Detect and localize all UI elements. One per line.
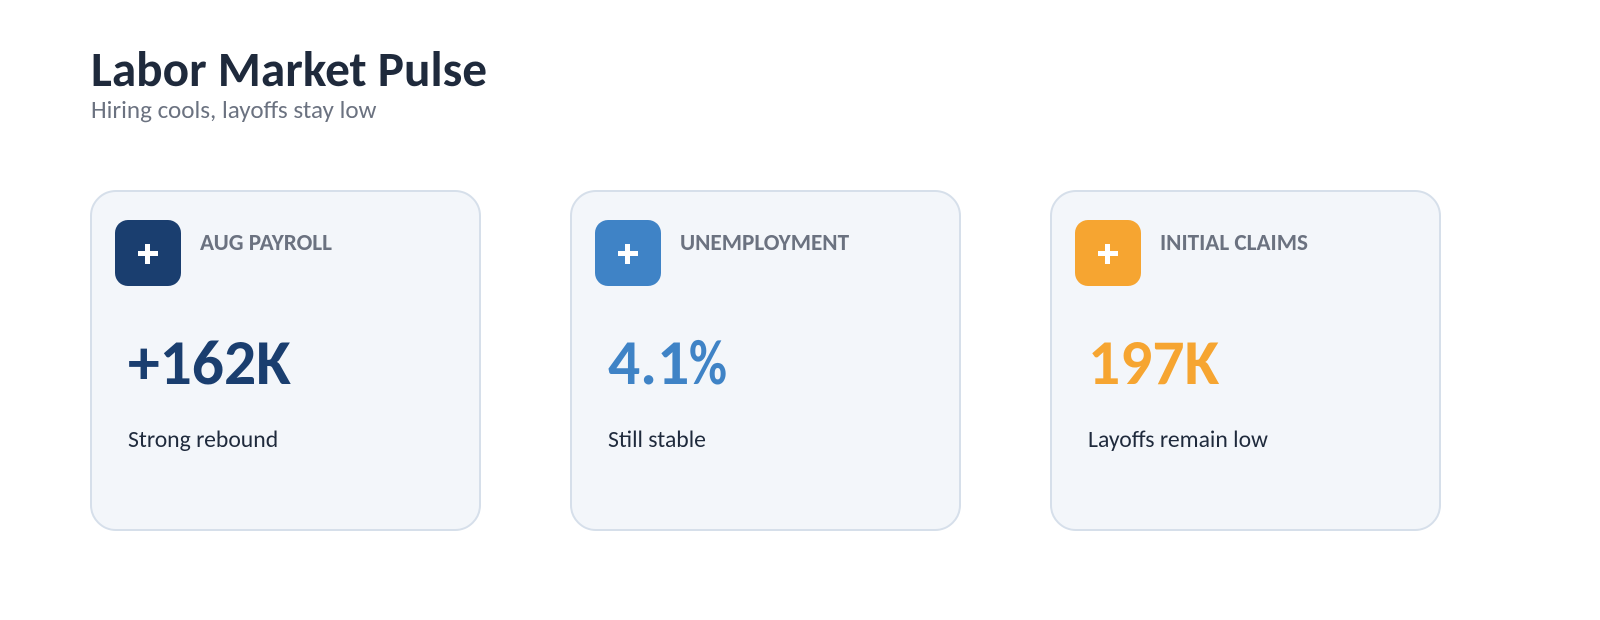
title: Labor Market Pulse — [91, 40, 487, 100]
value: 4.1%: % — [689, 325, 727, 402]
value: 4.1% — [608, 325, 727, 402]
panel: unemployment — [570, 190, 961, 531]
panel: aug payroll — [90, 190, 481, 531]
note: layoffs remain low: Layoffs remain low — [1088, 425, 1268, 454]
note: strong rebound: Strong rebound — [128, 425, 278, 454]
label: aug payroll: AUG PAYROLL — [200, 229, 332, 257]
label: unemployment: UNEMPLOYMENT — [680, 229, 849, 257]
panel: initial claims — [1050, 190, 1441, 531]
value: 4.1%: 4.1 — [608, 325, 689, 402]
subtitle: Hiring cools, layoffs stay low — [91, 94, 376, 125]
icon: plus navy — [115, 220, 181, 286]
value: +162K: +162K — [128, 325, 291, 402]
icon: plus orange — [1075, 220, 1141, 286]
value: 197K: 197K — [1088, 325, 1219, 402]
label: initial claims: INITIAL CLAIMS — [1160, 229, 1308, 257]
icon: plus blue — [595, 220, 661, 286]
note: still stable: Still stable — [608, 425, 706, 454]
